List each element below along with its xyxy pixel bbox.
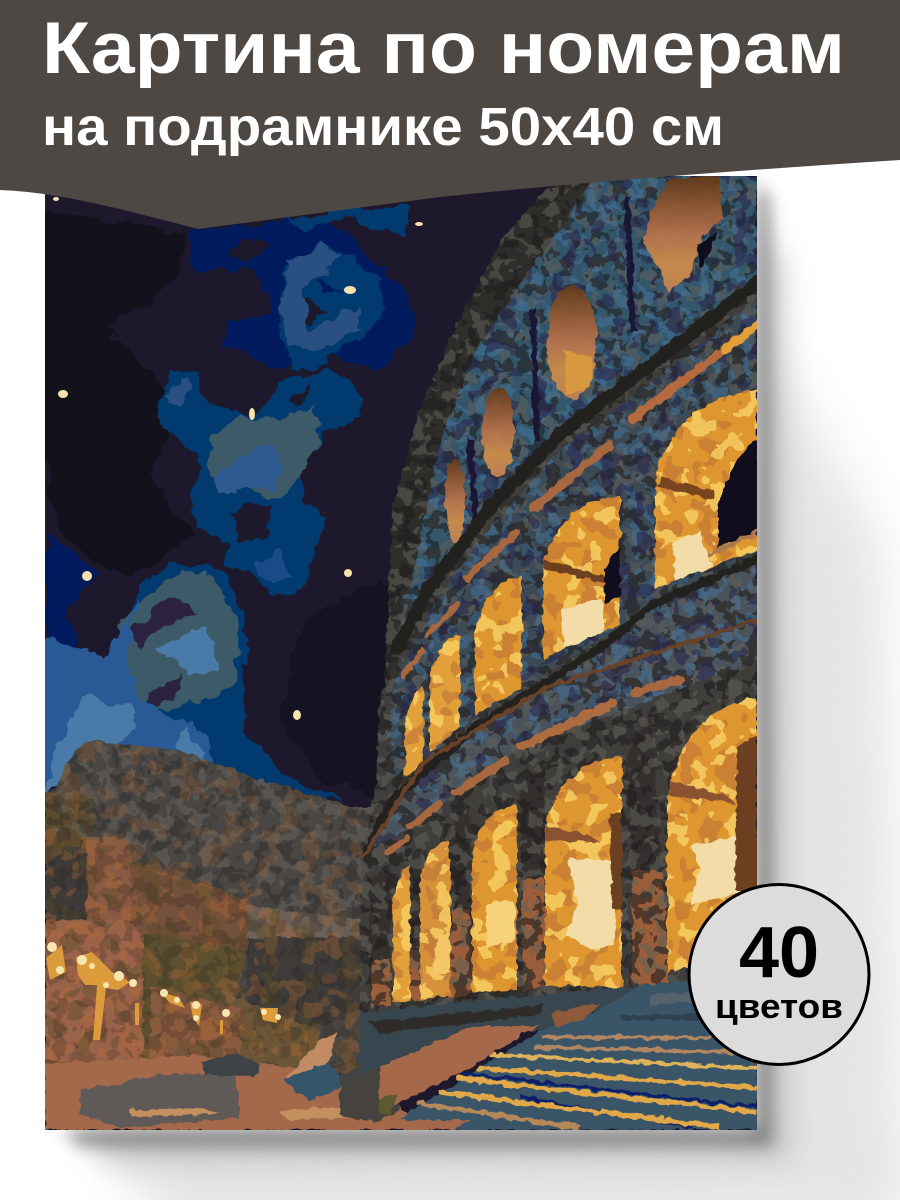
Colosseum main wall — [359, 176, 757, 1013]
badge: 40 colours — [689, 884, 869, 1064]
badge: 40 colours: 40 — [739, 913, 819, 993]
foreground ground and path — [45, 1033, 420, 1130]
title: Картина по номерам — [42, 8, 845, 89]
upper tier windows — [445, 177, 722, 542]
badge: 40 colours: цветов — [715, 988, 843, 1026]
distant arena wall — [45, 740, 372, 1074]
night sky with blue clouds — [35, 205, 413, 800]
painting: Colosseum at night — [35, 175, 757, 1130]
dark cornice lines — [366, 283, 757, 852]
lamps on the distant wall — [46, 942, 281, 1040]
wall paint texture — [359, 176, 757, 1013]
orange cornice ledges — [363, 325, 757, 857]
subtitle: на подрамнике 50х40 см — [42, 97, 724, 157]
canvas drop shadow — [62, 180, 900, 1200]
lit arches — [392, 390, 757, 1002]
stairs and ramp — [360, 975, 757, 1130]
vertical shadow lines — [470, 195, 633, 530]
stars — [53, 197, 423, 720]
header banner — [0, 0, 900, 229]
